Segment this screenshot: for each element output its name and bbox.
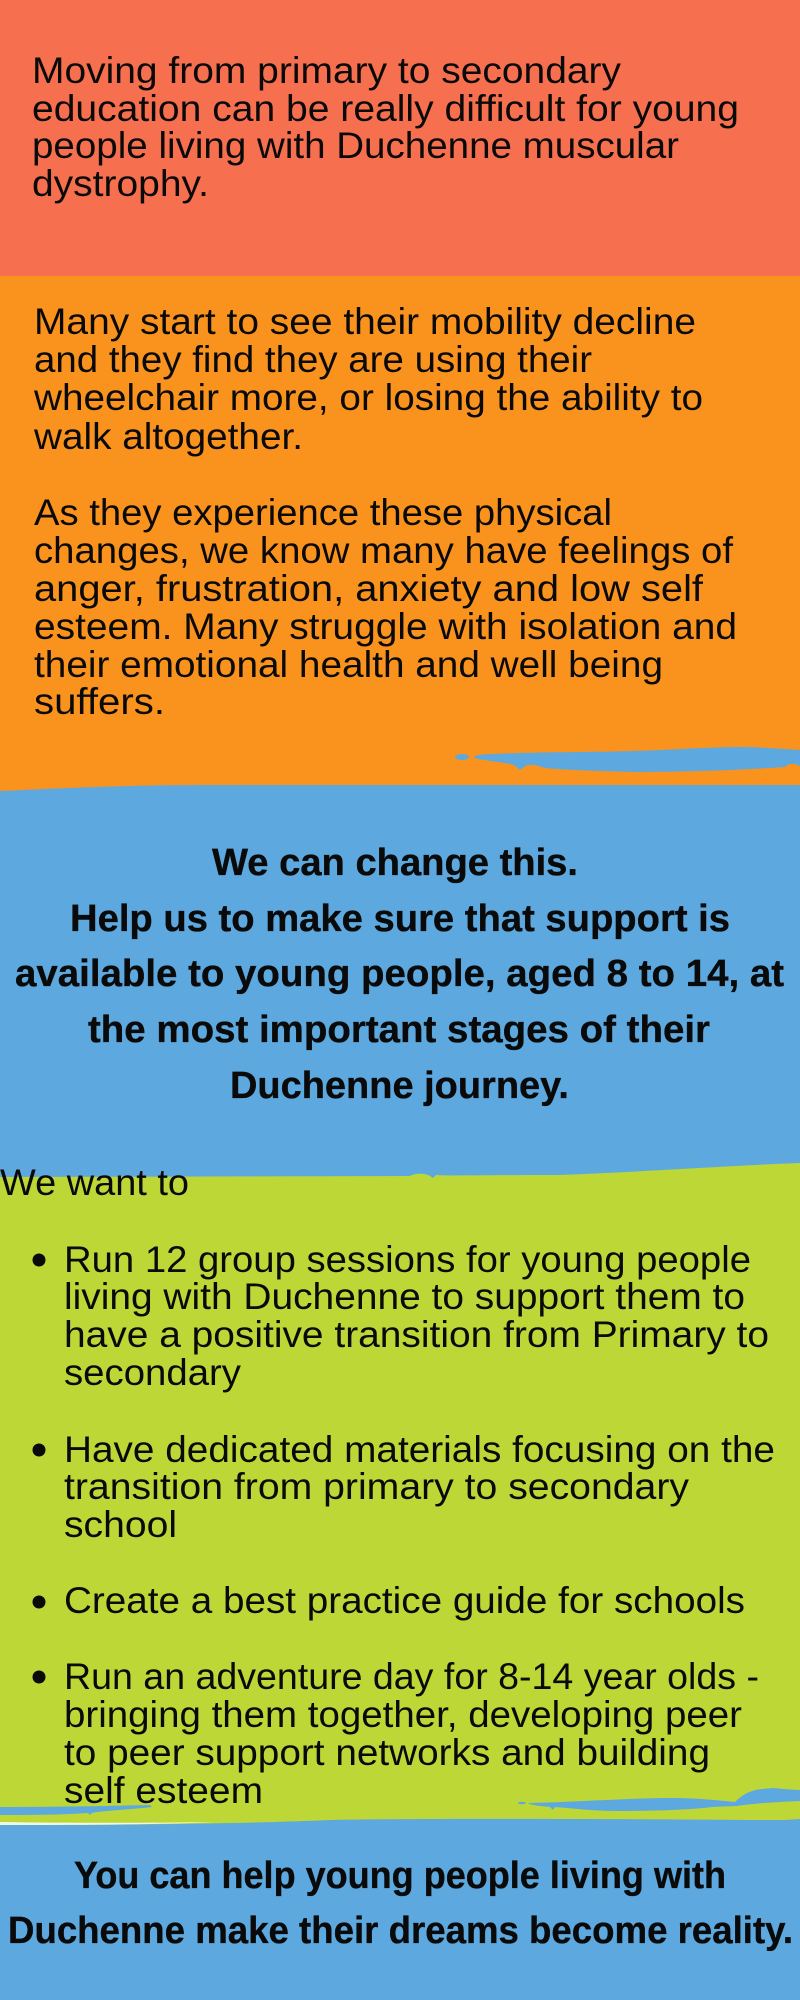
text block: intro: Moving from primary to secondary	[32, 50, 622, 91]
brush stroke: blue right	[528, 1788, 800, 1811]
bullet: dedicated materials	[32, 1429, 775, 1545]
decorative white sliver	[0, 1822, 215, 1825]
text block: mobility: Many start to see their mobility decline	[34, 301, 696, 342]
text block: emotional health: esteem. Many struggle with isolation and	[34, 606, 737, 647]
text block: intro	[32, 50, 739, 204]
bullet: adventure day: Run an adventure day for 8-14 year olds -	[64, 1656, 759, 1697]
heading: we can change this	[15, 842, 784, 1107]
panel: green goals	[0, 1162, 800, 1825]
bullet: group sessions: Run 12 group sessions for young people	[64, 1239, 751, 1280]
heading: we can change this: We can change this.	[212, 842, 578, 884]
bullet: best practice guide: Create a best practice guide for schools	[64, 1580, 745, 1621]
text block: emotional health: As they experience these physical	[34, 492, 612, 533]
text block: emotional health: changes, we know many have feelings of	[34, 530, 734, 571]
text block: emotional health	[34, 492, 737, 722]
panel: red intro	[0, 0, 800, 276]
heading: we can change this: Help us to make sure that support is	[70, 898, 730, 940]
closing message: You can help young people living with	[74, 1855, 726, 1897]
panel: orange challenges	[0, 276, 800, 796]
bullet: adventure day: to peer support networks and building	[64, 1732, 710, 1773]
label: we want to: We want to	[0, 1162, 189, 1203]
panel: blue call to change	[0, 785, 800, 1200]
text block: emotional health: suffers.	[34, 681, 165, 722]
text block: emotional health: their emotional health and well being	[34, 644, 663, 685]
text block: intro: dystrophy.	[32, 163, 209, 204]
bullet: dedicated materials: school	[64, 1504, 177, 1545]
bullet list	[32, 1239, 775, 1811]
text block: emotional health: anger, frustration, anxiety and low self	[34, 568, 704, 609]
brush stroke: blue in orange	[474, 747, 800, 772]
text block: mobility: wheelchair more, or losing the ability to	[33, 377, 703, 418]
bullet: dedicated materials: Have dedicated materials focusing on the	[64, 1429, 775, 1470]
bullet: adventure day	[32, 1656, 759, 1811]
panel: blue closing	[0, 1819, 800, 2000]
brush stroke: blue left	[0, 1805, 152, 1815]
bullet: group sessions	[32, 1239, 769, 1393]
text block: mobility: walk altogether.	[33, 416, 303, 457]
heading: we can change this: the most important stages of their	[88, 1009, 710, 1051]
heading: we can change this: Duchenne journey.	[230, 1065, 569, 1107]
closing message	[8, 1855, 793, 1952]
heading: we can change this: available to young people, aged 8 to 14, at	[15, 953, 784, 995]
text block: mobility: and they find they are using their	[34, 339, 592, 380]
closing message: Duchenne make their dreams become reality.	[8, 1910, 793, 1952]
bullet: group sessions: living with Duchenne to support them to	[64, 1276, 745, 1317]
text block: mobility	[33, 301, 703, 457]
bullet: adventure day: bringing them together, developing peer	[64, 1694, 742, 1735]
text block: intro: education can be really difficult for young	[32, 88, 739, 129]
bullet: adventure day: self esteem	[64, 1770, 263, 1811]
text block: intro: people living with Duchenne muscular	[32, 125, 679, 166]
bullet: group sessions: have a positive transition from Primary to	[64, 1314, 769, 1355]
bullet: group sessions: secondary	[64, 1352, 242, 1393]
bullet: dedicated materials: transition from primary to secondary	[64, 1466, 690, 1507]
